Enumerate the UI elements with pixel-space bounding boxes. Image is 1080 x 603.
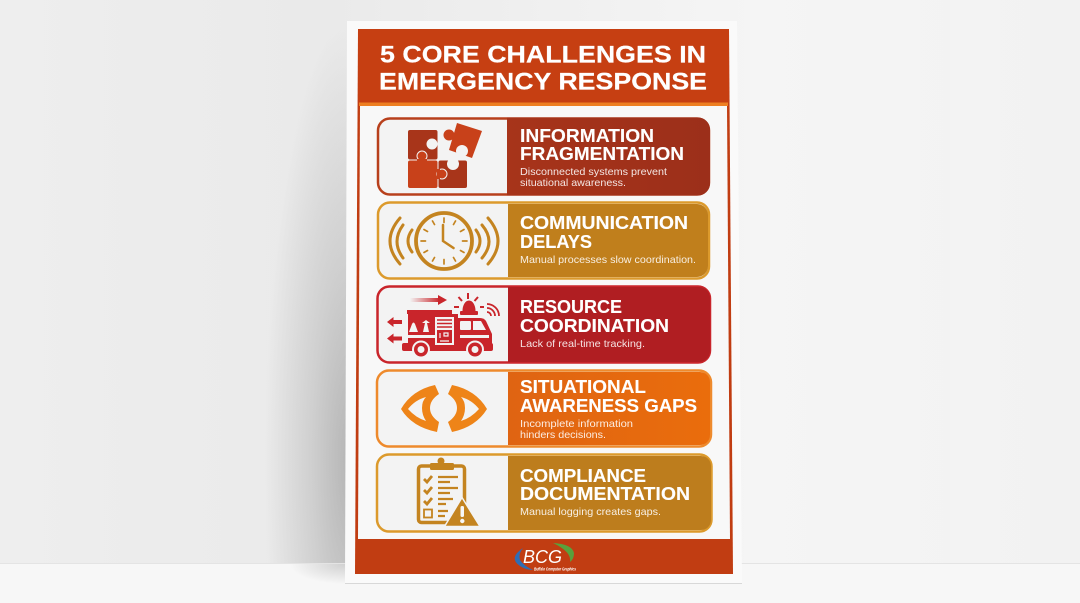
- row 5: compliance documentation: [377, 454, 712, 532]
- title: 5 CORE CHALLENGES IN: [380, 42, 706, 68]
- row 2 text: [520, 212, 696, 266]
- row 3 text: [520, 296, 669, 350]
- logo: BCG: [515, 543, 576, 572]
- row 2 text: COMMUNICATION: [520, 212, 688, 233]
- row 1 text: INFORMATION: [520, 125, 654, 146]
- row 4 text: [520, 376, 697, 441]
- title: [379, 42, 707, 96]
- row 2 text: DELAYS: [520, 231, 592, 252]
- row 1 text: Disconnected systems prevent: [520, 167, 667, 178]
- row 4 text: hinders decisions.: [520, 430, 606, 441]
- row 1 text: FRAGMENTATION: [520, 143, 684, 164]
- row 1 text: situational awareness.: [520, 178, 626, 189]
- floor: [0, 563, 1080, 603]
- icon: clipboard with warning: [418, 458, 480, 526]
- row 3 text: COORDINATION: [520, 315, 669, 336]
- floor shadow: [285, 563, 350, 589]
- row 4 text: SITUATIONAL: [520, 376, 646, 397]
- row 1 text: [520, 125, 684, 189]
- row 4 text: AWARENESS GAPS: [520, 395, 697, 416]
- row 5 text: DOCUMENTATION: [520, 483, 690, 504]
- row 2: communication delays: [378, 202, 709, 278]
- poster sheet: [345, 21, 742, 584]
- row 5 text: COMPLIANCE: [520, 465, 646, 486]
- wall shadow beside poster: [250, 0, 360, 563]
- row 5 text: [520, 465, 690, 518]
- row 5 text: Manual logging creates gaps.: [520, 507, 661, 518]
- title: EMERGENCY RESPONSE: [379, 68, 707, 96]
- icon: clock with sound waves: [390, 213, 498, 269]
- row 4 text: Incomplete information: [520, 419, 633, 430]
- icon: fire truck: [387, 293, 499, 358]
- row 3 text: Lack of real-time tracking.: [520, 339, 645, 350]
- row 1: information fragmentation: [378, 118, 710, 196]
- row 3 text: RESOURCE: [520, 296, 622, 317]
- logo: BCG: Buffalo Computer Graphics: [534, 566, 576, 572]
- logo: BCG: BCG: [523, 547, 562, 567]
- row 3: resource coordination: [378, 286, 710, 362]
- icon: puzzle pieces: [408, 123, 482, 188]
- header band: [358, 29, 729, 106]
- content panel: [358, 106, 730, 539]
- poster frame: [355, 29, 733, 574]
- row 2 text: Manual processes slow coordination.: [520, 255, 696, 266]
- icon: split eye: [401, 385, 487, 432]
- row 4: situational awareness gaps: [377, 370, 711, 446]
